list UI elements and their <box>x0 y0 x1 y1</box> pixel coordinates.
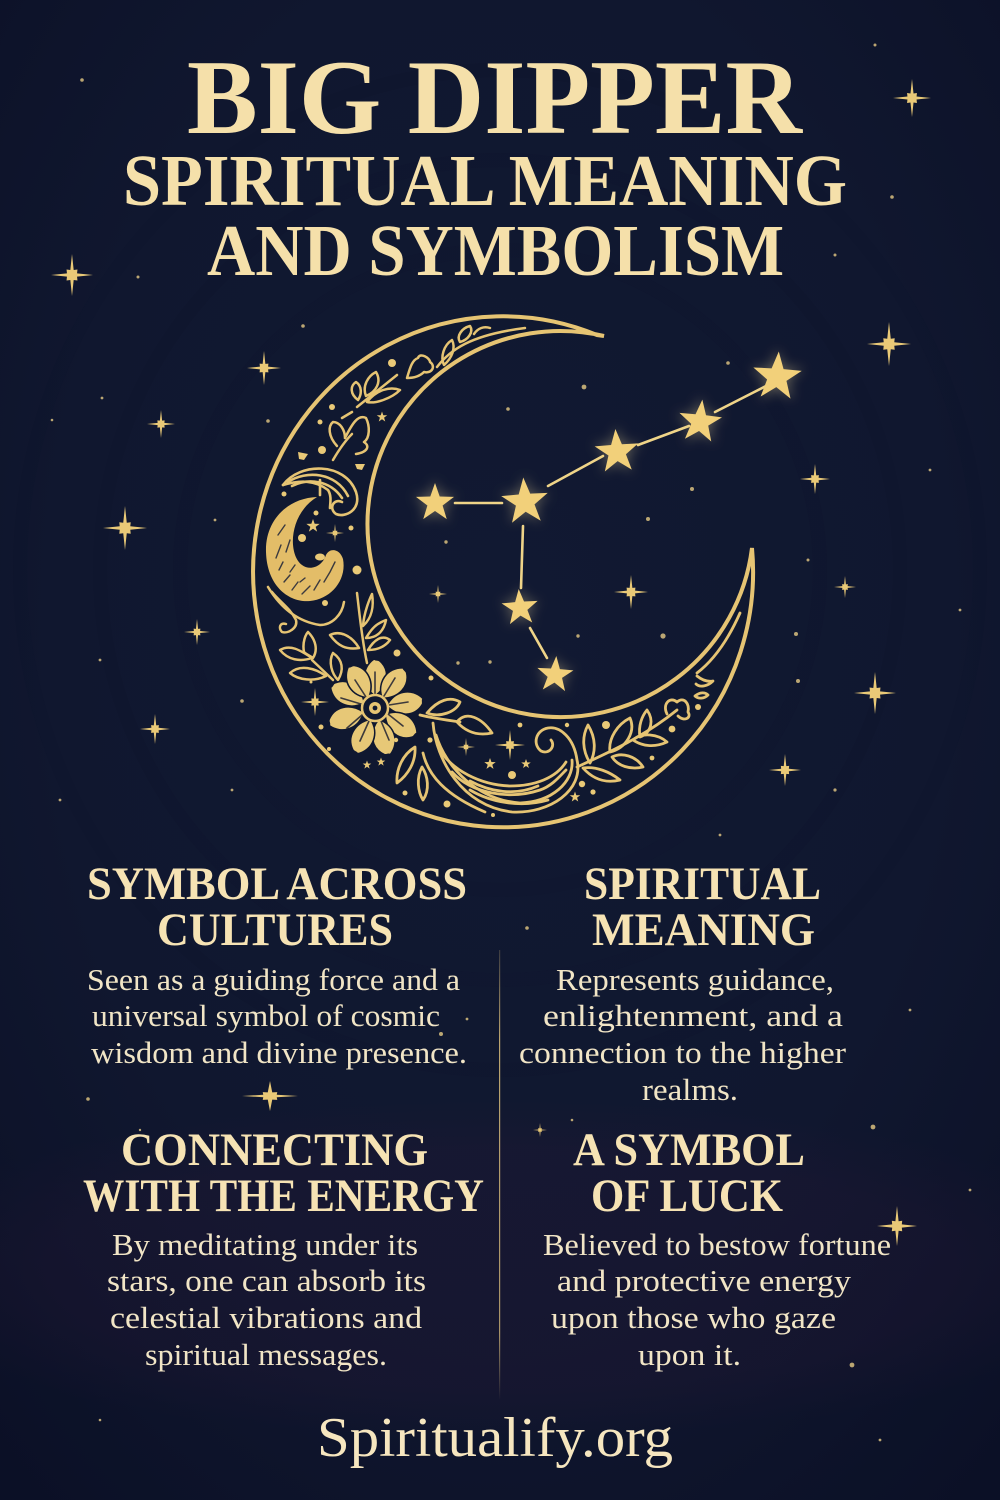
title line: Big Dipper: BIG DIPPER <box>187 39 803 156</box>
body text: wisdom and divine presence. <box>91 1035 467 1070</box>
body text: stars, one can absorb its <box>107 1263 426 1298</box>
title <box>123 39 847 291</box>
top sprigs <box>330 326 525 460</box>
heading <box>584 858 821 956</box>
crescent floral ornaments <box>266 326 740 817</box>
title line: Spiritual Meaning: SPIRITUAL MEANING <box>123 140 847 221</box>
ornaments inside moon swirl <box>282 359 396 606</box>
connecting lines <box>455 386 766 658</box>
body text <box>519 962 847 1107</box>
body text: celestial vibrations and <box>110 1300 423 1335</box>
panel: spiritual meaning <box>519 858 847 1107</box>
body text: spiritual messages. <box>145 1337 387 1372</box>
heading: CULTURES <box>157 904 393 956</box>
body text <box>543 1227 891 1372</box>
star glows <box>413 349 804 691</box>
body text: Believed to bestow fortune <box>543 1227 891 1262</box>
bottom leaves and sweeping swirl <box>397 613 740 812</box>
heading: CONNECTING <box>121 1124 428 1176</box>
heading <box>87 858 467 956</box>
big dipper constellation <box>413 349 804 692</box>
heading <box>573 1124 805 1222</box>
lower-left sprigs and vine <box>268 587 390 680</box>
center divider <box>499 950 500 1400</box>
heading: SPIRITUAL <box>584 858 821 910</box>
crescent outline <box>253 316 753 827</box>
large flower <box>325 659 425 758</box>
body text: upon those who gaze <box>551 1300 836 1335</box>
body text: enlightenment, and a <box>543 998 843 1033</box>
heading: A SYMBOL <box>573 1124 805 1176</box>
panel: a symbol of luck <box>543 1124 891 1372</box>
heading: OF LUCK <box>591 1170 783 1222</box>
sparkle stars scattered across sky <box>51 79 931 1246</box>
body text: realms. <box>642 1072 738 1107</box>
body text: connection to the higher <box>519 1035 847 1070</box>
title line: And Symbolism: AND SYMBOLISM <box>207 210 784 291</box>
heading: MEANING <box>592 904 815 956</box>
body text <box>107 1227 426 1372</box>
heading: WITH THE ENERGY <box>83 1170 484 1222</box>
footer website: Spiritualify.org <box>317 1407 673 1469</box>
body text: universal symbol of cosmic <box>92 998 440 1033</box>
paisley swirl <box>283 469 357 515</box>
crescent dots and tiny sparkles <box>301 650 701 817</box>
body text: By meditating under its <box>112 1227 418 1262</box>
panel: symbol across cultures <box>87 858 467 1070</box>
moon swirl hatching <box>276 525 335 594</box>
crescent moon illustration <box>253 316 753 827</box>
heading: SYMBOL ACROSS <box>87 858 467 910</box>
body text: Represents guidance, <box>556 962 834 997</box>
seven dipper stars <box>416 350 803 692</box>
panel: connecting with the energy <box>83 1124 484 1372</box>
body text: Seen as a guiding force and a <box>87 962 460 997</box>
body text: and protective energy <box>557 1263 852 1298</box>
body text: upon it. <box>638 1337 741 1372</box>
body text <box>87 962 467 1070</box>
heading <box>83 1124 484 1222</box>
inner golden moon swirl <box>266 497 344 601</box>
